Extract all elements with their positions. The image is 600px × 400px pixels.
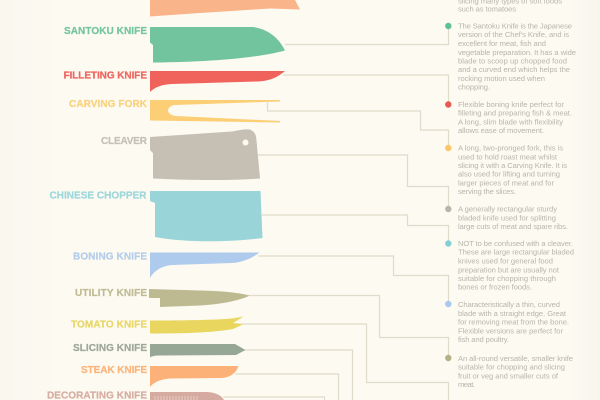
text: cleaver: A generally rectangular sturdy: [458, 204, 557, 214]
label: carving fork: CARVING FORK: [69, 99, 148, 110]
text: santoku: and a curved end which helps the: [458, 65, 570, 74]
chinese chopper: [50, 190, 262, 241]
description: utility: [249, 296, 573, 389]
dot: carving fork: [445, 145, 451, 151]
knife: santoku: [64, 26, 285, 62]
carving fork: [69, 99, 280, 122]
text: boning: Characteristically a thin, curved: [458, 300, 560, 309]
description: chinese chopper: [262, 215, 574, 292]
blade: steak: [150, 366, 238, 387]
label: utility knife: UTILITY KNIFE: [75, 288, 147, 299]
dot: filleting: [445, 101, 451, 108]
dot: boning: [445, 301, 451, 307]
text: chinese chopper: preparation but are usually not: [458, 266, 560, 274]
boning knife: [73, 252, 260, 278]
connector: boning: [258, 256, 448, 304]
blade: santoku: [150, 27, 285, 62]
blade: utility: [149, 289, 250, 307]
connector: slicing: [245, 350, 352, 400]
text: utility: fruit or veg and smaller cuts of: [458, 372, 559, 380]
label: steak knife: STEAK KNIFE: [81, 365, 147, 376]
blade: slicing: [150, 344, 246, 358]
dot: utility: [445, 355, 451, 361]
text: cleaver: large cuts of meat and spare ribs.: [458, 222, 568, 231]
connector: carving fork: [268, 101, 448, 148]
fork shape: [150, 100, 280, 122]
text: santoku: blade to scoop up chopped food: [458, 56, 567, 66]
text: utility: meat.: [458, 380, 475, 389]
text: santoku: chopping.: [458, 82, 490, 92]
text: filleting: allows ease of movement.: [458, 126, 544, 135]
text: santoku: [458, 22, 576, 92]
text: utility: suitable for chopping and slicing: [458, 362, 565, 372]
label: chinese chopper: CHINESE CHOPPER: [50, 190, 147, 202]
blade: boning: [150, 252, 260, 278]
description: boning: [258, 256, 569, 344]
text: cleaver: bladed knife used for splitting: [458, 214, 556, 222]
connector: tomato: [242, 324, 448, 400]
connector: filleting: [283, 75, 448, 104]
text: filleting: A long, slim blade with flexibility: [458, 118, 563, 126]
label: boning knife: BONING KNIFE: [73, 252, 147, 262]
text: boning: for removing meat from the bone.: [458, 318, 569, 326]
text: boning: fish and poultry.: [458, 335, 509, 344]
blade: cleaver with hole: [150, 129, 260, 180]
text: carving fork: larger pieces of meat and for: [458, 178, 554, 188]
text: boning: [458, 300, 569, 344]
blade: tomato with forked tip: [150, 316, 244, 334]
connector: utility: [249, 296, 448, 358]
steak knife: [81, 365, 238, 387]
text: santoku: version of the Chef's Knife, and is: [458, 30, 569, 39]
text: carving fork: slicing it with a Carving Knife. It is: [458, 161, 567, 170]
text: carving fork: [458, 144, 567, 196]
tomato knife: [71, 316, 244, 334]
text: utility: [458, 354, 573, 389]
slicing knife: [73, 343, 246, 358]
knife: filleting: [64, 70, 285, 92]
blade: chinese chopper: [150, 191, 262, 241]
label: filleting knife: FILLETING KNIFE: [64, 70, 147, 82]
text: filleting: filleting and preparing fish & meat.: [458, 108, 572, 118]
description: santoku: [285, 22, 576, 92]
label: tomato knife: TOMATO KNIFE: [71, 320, 147, 330]
text block: top description: [458, 0, 562, 14]
blade: decorating with perforations: [150, 392, 224, 400]
connector: chinese chopper: [262, 215, 448, 243]
text: carving fork: used to hold roast meat whilst: [458, 152, 558, 162]
blade: filleting: [150, 71, 285, 92]
connector: decorating: [223, 397, 324, 400]
description: filleting: [283, 75, 572, 135]
text: carving fork: serving the slices.: [458, 187, 516, 196]
text: chinese chopper: knives used for general food: [458, 256, 553, 266]
text: chinese chopper: [458, 239, 574, 292]
dot: santoku: [445, 23, 451, 29]
text block: top description: such as tomatoes: [458, 4, 516, 14]
perforations: [155, 396, 197, 400]
text: santoku: rocking motion used when: [458, 74, 545, 83]
text: carving fork: A long, two-pronged fork, this is: [458, 144, 563, 152]
text: santoku: vegetable preparation. It has a wide: [458, 48, 576, 57]
text: chinese chopper: These are large rectangular bladed: [458, 248, 574, 256]
text: carving fork: also used for lifting and turning: [458, 170, 560, 178]
text: boning: blade with a straight edge. Great: [458, 309, 567, 318]
text: chinese chopper: NOT to be confused with a cleaver.: [458, 239, 573, 248]
connector: santoku: [285, 26, 448, 44]
text: chinese chopper: bones or frozen foods.: [458, 282, 532, 292]
connector: cleaver: [258, 155, 448, 209]
utility knife: [75, 288, 250, 307]
text: utility: An all-round versatile, smaller knife: [458, 354, 573, 363]
connector: steak: [235, 374, 338, 400]
knife: tomato-style blade cut off at top: [150, 0, 300, 16]
text: boning: Flexible versions are perfect for: [458, 326, 563, 336]
text: chinese chopper: suitable for chopping through: [458, 274, 556, 283]
description: carving fork: [268, 101, 567, 196]
text: santoku: The Santoku Knife is the Japanese: [458, 22, 572, 30]
label: santoku knife: SANTOKU KNIFE: [64, 26, 147, 37]
text: santoku: excellent for meat, fish and: [458, 39, 546, 48]
dot: cleaver: [445, 206, 451, 212]
text: cleaver: [458, 204, 568, 231]
cleaver: [101, 129, 260, 180]
description: cleaver: [258, 155, 568, 231]
label: cleaver: CLEAVER: [101, 136, 148, 147]
dot: chinese chopper: [445, 240, 451, 247]
text: filleting: [458, 100, 572, 135]
decorating knife: [47, 390, 224, 400]
label: slicing knife: SLICING KNIFE: [73, 343, 147, 354]
text: filleting: Flexible boning knife perfect for: [458, 100, 564, 109]
